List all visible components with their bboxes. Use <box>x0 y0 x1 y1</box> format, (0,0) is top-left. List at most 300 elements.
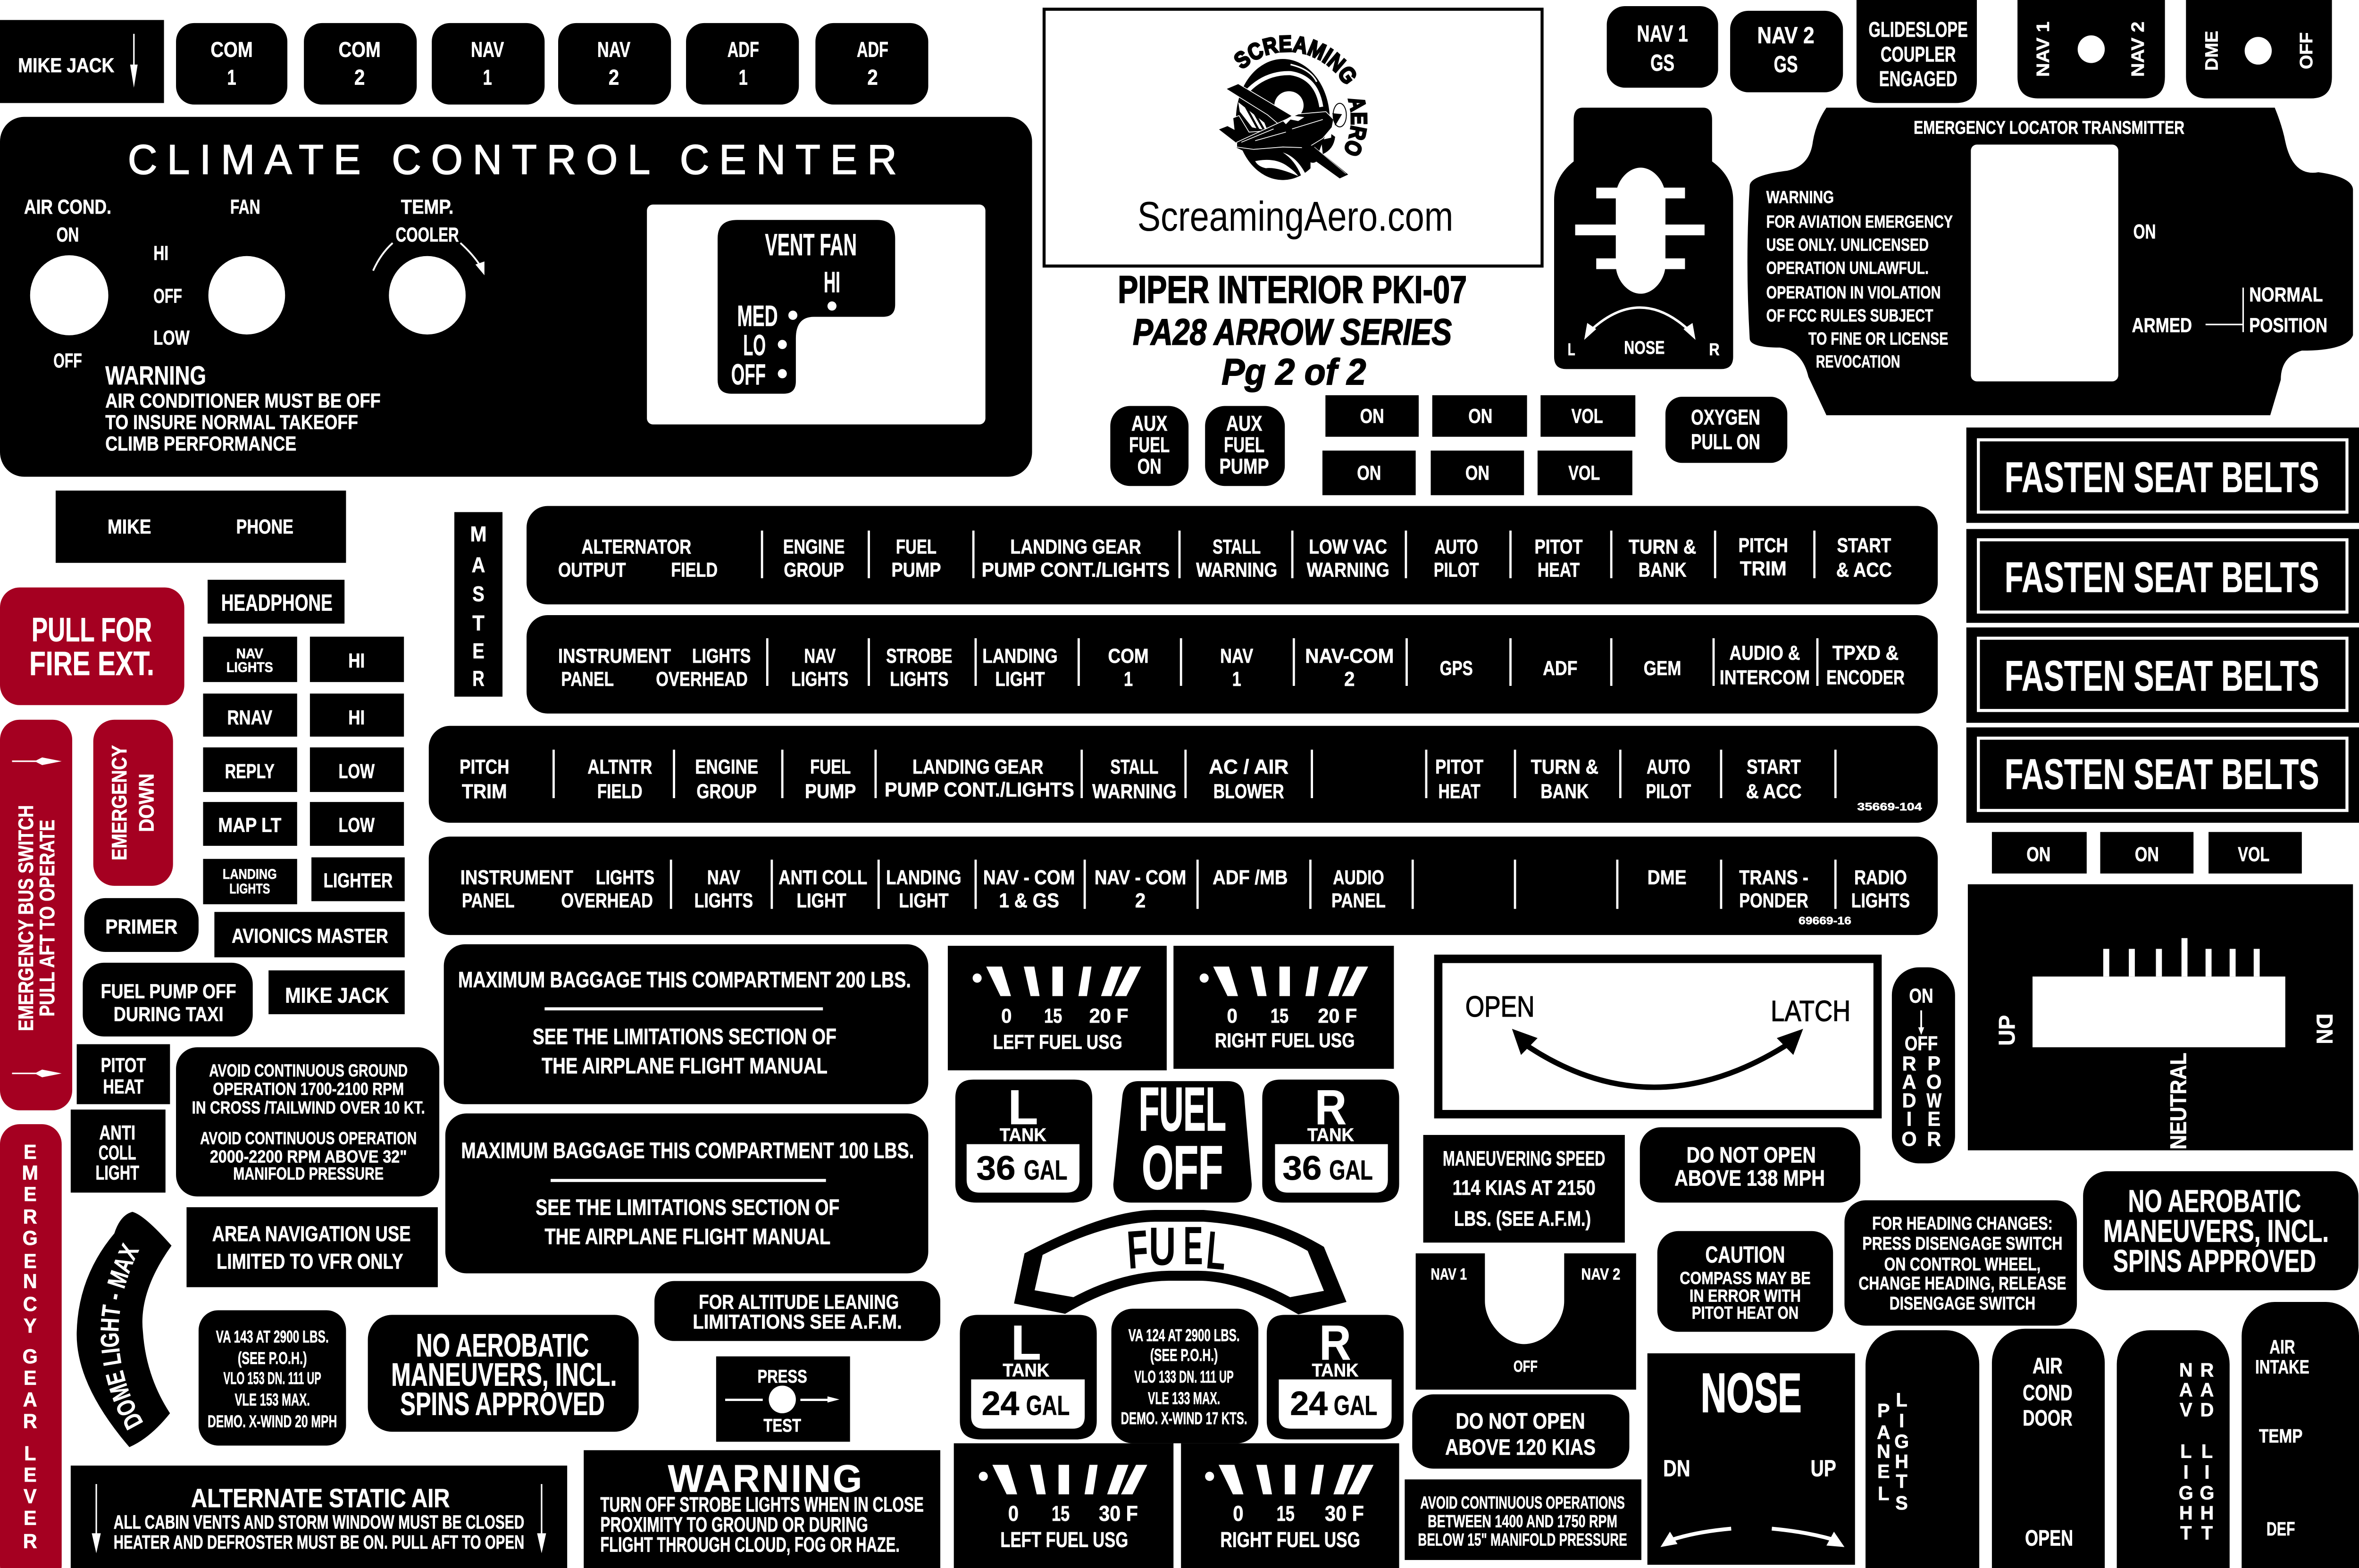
placard: avoid continuous operations: AVOID CONTINUOUS OPERATIONS <box>1420 1493 1625 1512</box>
placard: avoid continuous operation <box>176 1047 439 1196</box>
placard: fuel pump off during taxi <box>83 963 253 1036</box>
placard: panel lights: P <box>1877 1400 1890 1421</box>
placard: radio power: R <box>1927 1127 1941 1150</box>
placard: nav rad lights: L <box>2201 1441 2213 1462</box>
placard: panel lights: T <box>1896 1471 1907 1492</box>
breaker strip 1: WARNING <box>1196 559 1277 581</box>
breaker strip 2: OVERHEAD <box>656 668 748 690</box>
breaker strip 1: ALTERNATOR <box>581 535 691 558</box>
breaker strip 1: PITOT <box>1535 535 1583 558</box>
breaker strip 4: LIGHTS <box>596 866 654 889</box>
placard: com 2: COM <box>338 37 381 62</box>
placard: v speeds 124 <box>1112 1309 1258 1443</box>
breaker strip 3: START <box>1747 755 1801 778</box>
placard: emergency gear lever: E <box>24 1183 37 1205</box>
placard: caution compass: CAUTION <box>1705 1242 1785 1268</box>
warning text: TO FINE OR LICENSE <box>1808 328 1948 348</box>
placard: reply <box>203 747 297 792</box>
breaker strip 4: NAV - COM <box>983 866 1075 889</box>
placard: emergency gear lever: E <box>24 1507 37 1529</box>
placard: map lt: MAP LT <box>218 814 282 836</box>
placard: emergency gear lever: M <box>22 1161 38 1184</box>
placard: open latch: OPEN <box>1465 990 1535 1023</box>
panel: trim indicator: NEUTRAL <box>2166 1053 2191 1150</box>
placard: nav 1 gs: GS <box>1650 50 1674 76</box>
breaker strip 1: LANDING GEAR <box>1010 535 1141 558</box>
placard: radio power <box>1892 967 1955 1163</box>
placard: right tank 36 gal <box>1262 1080 1399 1202</box>
placard: left tank 36 gal: L <box>1008 1080 1038 1134</box>
placard: avionics master: AVIONICS MASTER <box>232 925 388 947</box>
breaker strip 4: ADF /MB <box>1213 866 1288 889</box>
switch: nav 1 nav 2: NAV 2 <box>2128 22 2148 77</box>
placard: headphone <box>208 580 344 624</box>
placard: maximum baggage 200: THE AIRPLANE FLIGHT MANUAL <box>542 1053 828 1078</box>
placard: alternate static air: ALTERNATE STATIC AIR <box>191 1483 450 1513</box>
placard: no aerobatic maneuvers left <box>368 1315 639 1432</box>
placard: fasten seat belts 1 <box>1966 427 2359 523</box>
placard: no aerobatic maneuvers right: NO AEROBATIC <box>2128 1184 2301 1219</box>
placard: master: R <box>472 667 485 691</box>
placard: panel lights: L <box>1878 1483 1890 1504</box>
breaker strip 4: OVERHEAD <box>561 889 653 912</box>
control: temperature knob <box>373 196 485 334</box>
logo mark: swirl and plane: SCREAMING <box>1230 31 1362 89</box>
placard: v speeds 143: VLE 153 MAX. <box>234 1390 310 1410</box>
control: air conditioning knob: OFF <box>53 350 82 372</box>
breaker strip 1: ENGINE <box>783 535 845 558</box>
breaker strip 4: NAV <box>707 866 740 889</box>
placard: emergency gear lever: L <box>24 1442 36 1465</box>
placard: panel lights: A <box>1877 1421 1891 1443</box>
placard: fuel off <box>1113 1075 1252 1202</box>
warning text: AIR CONDITIONER MUST BE OFF <box>105 390 381 412</box>
placard: pitot heat: PITOT <box>101 1054 146 1076</box>
placard: caution compass: PITOT HEAT ON <box>1692 1302 1799 1323</box>
breaker strip 2: 1 <box>1124 668 1133 690</box>
placard: right tank 36 gal: GAL <box>1329 1155 1373 1186</box>
placard: air intake temp def: AIR <box>2269 1336 2295 1358</box>
placard: maximum baggage 100 <box>445 1113 928 1273</box>
breaker strip 2: NAV <box>1220 645 1253 667</box>
placard: maximum baggage 200: SEE THE LIMITATIONS SECTION OF <box>533 1024 837 1049</box>
placard: emergency gear lever: E <box>24 1367 37 1389</box>
placard: nav rad lights: I <box>2183 1461 2189 1483</box>
breaker strip 3: ALTNTR <box>587 755 652 778</box>
breaker strip 1: GROUP <box>784 559 844 581</box>
placard: aux fuel pump: AUX <box>1226 411 1262 435</box>
control: fan knob: HI <box>153 242 168 264</box>
placard: emergency bus switch <box>0 720 72 1110</box>
placard: maneuvering speed: 114 KIAS AT 2150 <box>1453 1177 1596 1200</box>
logo panel: screaming aero <box>1044 9 1542 266</box>
panel: emergency locator transmitter: POSITION <box>2249 314 2327 336</box>
placard: right tank 36 gal: R <box>1315 1080 1347 1134</box>
breaker strip 2: 1 <box>1232 668 1241 690</box>
control: air conditioning knob <box>24 196 111 372</box>
breaker strip 2: PANEL <box>561 668 614 690</box>
placard: anti coll light <box>71 1109 166 1193</box>
placard: panel lights: H <box>1895 1451 1908 1472</box>
panel: nose steering trim: NOSE <box>1624 337 1665 358</box>
placard: master: E <box>472 639 485 663</box>
placard: nav 1 gs <box>1607 6 1718 88</box>
placard: left fuel usg 20: LEFT FUEL USG <box>993 1031 1122 1053</box>
placard: map lt <box>203 802 297 846</box>
breaker strip 3: TRIM <box>462 780 507 802</box>
placard: nav rad lights: I <box>2204 1461 2209 1483</box>
placard: landing lights: LIGHTS <box>229 882 270 897</box>
placard: emergency gear lever: N <box>23 1270 37 1292</box>
breaker strip 3: LANDING GEAR <box>912 755 1043 778</box>
panel: trim indicator: UP <box>1994 1015 2020 1046</box>
placard: mike jack <box>0 20 164 103</box>
placard: emergency gear lever: G <box>23 1345 38 1368</box>
placard: nav 1: NAV <box>471 37 504 62</box>
panel: nose steering trim: L <box>1568 340 1575 359</box>
placard: nav rad lights: G <box>2200 1482 2214 1504</box>
placard: area navigation use <box>186 1207 438 1287</box>
switch: dme off <box>2186 0 2332 99</box>
placard: left fuel usg 20: 20 F <box>1089 1005 1129 1027</box>
placard: nav rad lights: G <box>2179 1482 2193 1504</box>
breaker strip 3: PITOT <box>1435 755 1483 778</box>
placard: air cond door: OPEN <box>2025 1526 2073 1551</box>
placard: hi: HI <box>348 649 365 672</box>
placard: no aerobatic maneuvers left: MANEUVERS, INCL. <box>391 1357 617 1393</box>
placard: avoid continuous operations: BETWEEN 1400 AND 1750 RPM <box>1428 1511 1617 1531</box>
placard: emergency down <box>93 720 173 886</box>
placard: glideslope coupler engaged <box>1857 0 1977 103</box>
placard: adf 1: ADF <box>728 37 759 62</box>
warning text: OPERATION IN VIOLATION <box>1766 282 1941 302</box>
placard: radio power: P <box>1927 1052 1941 1075</box>
placard: com 1: COM <box>210 37 253 62</box>
placard: right tank 24 gal: TANK <box>1312 1360 1359 1381</box>
breaker strip 4 <box>429 836 1938 935</box>
placard: hi <box>310 693 404 737</box>
placard: primer: PRIMER <box>105 915 177 938</box>
placard: radio power: O <box>1901 1127 1917 1150</box>
placard: nav 2 gs: NAV 2 <box>1757 23 1815 48</box>
breaker strip 2: STROBE <box>886 645 952 667</box>
breaker strip 2: LIGHTS <box>791 668 848 690</box>
switch: dme off: DME <box>2202 31 2222 71</box>
placard: pitot heat: HEAT <box>103 1076 144 1098</box>
breaker strip 4: AUDIO <box>1333 866 1384 889</box>
placard: nav rad lights: T <box>2201 1522 2213 1543</box>
placard: left fuel usg 30: 30 F <box>1099 1501 1138 1526</box>
placard: v speeds 143: (SEE P.O.H.) <box>238 1349 307 1368</box>
breaker strip 4: DME <box>1648 866 1687 889</box>
placard: emergency gear lever: Y <box>24 1314 37 1337</box>
breaker strip 3: GROUP <box>696 780 757 802</box>
placard: air intake temp def: INTAKE <box>2255 1356 2309 1377</box>
placard: fasten seat belts 3 <box>1966 627 2359 723</box>
placard: radio power: E <box>1927 1108 1941 1130</box>
placard: avoid continuous operation: 2000-2200 RPM ABOVE 32" <box>210 1146 407 1167</box>
breaker strip 3 <box>429 726 1938 823</box>
placard: air intake temp def: TEMP <box>2259 1426 2302 1447</box>
placard: panel lights: E <box>1877 1461 1890 1482</box>
placard: avoid continuous operation: IN CROSS /TAILWIND OVER 10 KT. <box>192 1097 425 1117</box>
placards: on on vol row 1 <box>1325 395 1635 437</box>
warning text <box>1766 187 1953 371</box>
placard: right fuel usg 20: RIGHT FUEL USG <box>1215 1029 1355 1051</box>
placard: right tank 36 gal: 36 <box>1282 1150 1322 1187</box>
breaker strip 4: INSTRUMENT <box>460 866 573 889</box>
breaker strip 3: HEAT <box>1438 780 1481 802</box>
warning text <box>105 360 381 455</box>
placard: left fuel usg 30: 0 <box>1008 1501 1019 1526</box>
placard: right tank 36 gal: TANK <box>1307 1125 1354 1145</box>
breaker strip 2 <box>527 615 1938 714</box>
placard: adf 2: 2 <box>867 65 878 89</box>
placard: right fuel usg 20: 0 <box>1227 1005 1238 1027</box>
breaker strip 2: TPXD & <box>1832 642 1899 664</box>
placard: pull for fire ext: PULL FOR <box>32 611 152 649</box>
placard: aux fuel pump: PUMP <box>1220 454 1269 478</box>
placard: air cond door: AIR <box>2033 1353 2063 1378</box>
placard: nav 1 nav 2 off selector: NAV 2 <box>1581 1265 1620 1283</box>
placard: nav 1 nav 2 off selector: NAV 1 <box>1431 1265 1467 1283</box>
placard: maximum baggage 100: SEE THE LIMITATIONS SECTION OF <box>535 1195 839 1220</box>
placard: altitude leaning: FOR ALTITUDE LEANING <box>699 1291 899 1313</box>
placard: nose dn up: NOSE <box>1701 1362 1802 1424</box>
placard: mike jack <box>268 970 405 1014</box>
placard: nav rad lights: D <box>2200 1399 2214 1421</box>
placard: left fuel usg 20: 15 <box>1044 1005 1062 1027</box>
placard: nav lights: LIGHTS <box>226 660 273 676</box>
placard: adf 1: 1 <box>739 65 748 89</box>
placard: avoid continuous operation: MANIFOLD PRESSURE <box>233 1163 384 1184</box>
placard: left tank 36 gal: GAL <box>1024 1155 1067 1186</box>
placard: v speeds 124: VLE 133 MAX. <box>1148 1389 1220 1408</box>
placard: area navigation use: AREA NAVIGATION USE <box>212 1221 411 1246</box>
breaker strip 3: 35669-104 <box>1857 801 1922 813</box>
warning text: OPERATION UNLAWFUL. <box>1766 258 1929 277</box>
placard: do not open above 120 kias: ABOVE 120 KIAS <box>1445 1435 1596 1460</box>
placard: air intake temp def: DEF <box>2267 1518 2295 1540</box>
breaker strip 2: LIGHTS <box>890 668 949 690</box>
placard: radio power: O <box>1926 1071 1941 1093</box>
placard: caution compass <box>1657 1231 1833 1332</box>
placard: nav 2 <box>558 23 671 105</box>
placard: warning strobe lights: TURN OFF STROBE LIGHTS WHEN IN CLOSE <box>600 1493 924 1517</box>
placard: right tank 24 gal: GAL <box>1334 1390 1377 1421</box>
placard: press test: PRESS <box>758 1366 807 1387</box>
panel: emergency locator transmitter: ARMED <box>2132 314 2192 336</box>
breaker strip 1: PILOT <box>1434 559 1479 581</box>
panel: nose steering trim: R <box>1709 340 1720 359</box>
switch: nav 1 nav 2: NAV 1 <box>2033 22 2053 77</box>
breaker strip 1: STALL <box>1213 535 1261 558</box>
placard: aux fuel on: AUX <box>1131 411 1167 435</box>
placards: on on vol row 2: ON <box>1357 462 1381 484</box>
switch: nav 1 nav 2 <box>2017 0 2165 99</box>
placard: left fuel usg 20 <box>948 946 1167 1070</box>
breaker strip 4: PANEL <box>462 889 515 912</box>
placard: left tank 24 gal <box>960 1315 1097 1439</box>
placard: maximum baggage 100: MAXIMUM BAGGAGE THIS COMPARTMENT 100 LBS. <box>461 1138 914 1163</box>
placard: nav rad lights: N <box>2179 1359 2193 1381</box>
breaker strip 2: GEM <box>1644 657 1681 679</box>
placard: pitot heat <box>77 1044 170 1104</box>
placard: left tank 24 gal: 24 <box>982 1385 1020 1422</box>
breaker strip 4: 69669-16 <box>1799 915 1851 926</box>
placard: warning strobe lights: PROXIMITY TO GROUND OR DURING <box>600 1514 868 1536</box>
placard: right tank 24 gal <box>1267 1315 1404 1439</box>
placard: no aerobatic maneuvers left: NO AEROBATIC <box>416 1328 589 1364</box>
placard: emergency gear lever: V <box>24 1485 37 1508</box>
placard: oxygen pull on <box>1665 397 1787 463</box>
placard: hi <box>310 637 404 682</box>
placard: adf 2: ADF <box>857 37 888 62</box>
breaker strip 1 <box>527 506 1938 604</box>
placard: nav 2: NAV <box>597 37 630 62</box>
placard: no aerobatic maneuvers left: SPINS APPROVED <box>400 1386 605 1422</box>
control: fan knob: OFF <box>153 285 182 307</box>
breaker strip 3: PITCH <box>460 755 509 778</box>
placard: caution compass: COMPASS MAY BE <box>1680 1268 1811 1288</box>
breaker strip 2: ENCODER <box>1826 666 1905 689</box>
vent fan cutout: HI <box>824 266 840 299</box>
placard: nav 1 nav 2 off selector: OFF <box>1514 1358 1538 1376</box>
placard: emergency down: DOWN <box>134 774 158 832</box>
placard: v speeds 143 <box>199 1310 346 1445</box>
logo mark: swirl and plane <box>1219 31 1372 183</box>
placard: heading changes: CHANGE HEADING, RELEASE <box>1858 1273 2066 1294</box>
placard: fuel arc: F <box>1125 1219 1150 1280</box>
placard: nav rad lights: A <box>2200 1379 2214 1401</box>
placard: lighter <box>311 858 405 901</box>
placard: v speeds 124: VLO 133 DN. 111 UP <box>1134 1367 1234 1386</box>
breaker strip 1: FUEL <box>896 535 937 558</box>
placard: emergency gear lever: E <box>24 1464 37 1486</box>
placard: master <box>454 512 502 697</box>
switch: dme off: OFF <box>2297 32 2317 69</box>
control: fan knob: LOW <box>153 326 190 349</box>
placard: warning strobe lights: WARNING <box>668 1458 862 1500</box>
placards: on on vol row 2: ON <box>1465 462 1489 484</box>
heading: climate control center: CLIMATE CONTROL CENTER <box>128 137 907 183</box>
placard: master: T <box>472 611 485 635</box>
placard: fasten seat belts 4 <box>1966 727 2359 823</box>
breaker strip 2: COM <box>1108 645 1149 667</box>
warning text: OF FCC RULES SUBJECT <box>1766 305 1933 325</box>
placard: oxygen pull on: OXYGEN <box>1691 405 1760 429</box>
breaker strip 4: ANTI COLL <box>778 866 867 889</box>
placard: emergency gear lever: G <box>23 1227 38 1249</box>
document title: Pg 2 of 2 <box>1221 351 1366 392</box>
breaker strip 2: NAV <box>804 645 836 667</box>
placard: right fuel usg 30: RIGHT FUEL USG <box>1220 1527 1360 1552</box>
placard: warning strobe lights: FLIGHT THROUGH CLOUD, FOG OR HAZE. <box>600 1534 900 1557</box>
placard: left tank 36 gal <box>955 1080 1092 1202</box>
breaker strip 2: NAV-COM <box>1305 645 1394 667</box>
placard: left fuel usg 30 <box>954 1443 1173 1568</box>
placards: on on vol row 2: VOL <box>1568 462 1600 484</box>
vent fan cutout: MED <box>737 300 778 332</box>
placard: avionics master <box>214 912 405 957</box>
placard: heading changes <box>1844 1201 2077 1326</box>
placard: nav rad lights: T <box>2180 1522 2192 1543</box>
placard: air cond door: DOOR <box>2023 1406 2073 1430</box>
warning text: WARNING <box>105 360 206 390</box>
placard: panel lights: I <box>1899 1410 1904 1431</box>
placard: pull for fire ext <box>0 587 184 705</box>
placard: radio power: W <box>1926 1089 1941 1111</box>
placards: on on vol row 3: ON <box>2135 843 2159 866</box>
placard: air cond door: COND <box>2023 1380 2073 1405</box>
placard: left tank 24 gal: L <box>1011 1315 1041 1370</box>
control: fan knob <box>153 196 285 349</box>
placard: anti coll light: COLL <box>99 1142 136 1164</box>
breaker strip 2: LANDING <box>982 645 1058 667</box>
placard: aux fuel on <box>1110 406 1188 486</box>
placard: adf 2 <box>815 23 928 105</box>
panel: emergency locator transmitter: NORMAL <box>2249 284 2323 306</box>
breaker strip 1: AUTO <box>1434 535 1478 558</box>
placard: radio power: ON <box>1909 984 1933 1007</box>
breaker strip 1: & ACC <box>1836 559 1892 581</box>
panel: trim indicator: DN <box>2312 1013 2337 1044</box>
placard: right fuel usg 30: 15 <box>1277 1501 1295 1526</box>
breaker strip 4: 2 <box>1135 889 1146 912</box>
breaker strip 1: TURN & <box>1629 535 1696 558</box>
placard: radio power: OFF <box>1905 1032 1938 1055</box>
placard: right tank 24 gal: R <box>1320 1315 1351 1370</box>
placard: mike phone: PHONE <box>236 516 293 538</box>
breaker strip 1: START <box>1837 534 1891 556</box>
breaker strip 4: LIGHT <box>899 889 949 912</box>
placard: warning strobe lights <box>584 1450 940 1568</box>
placard: avoid continuous operations <box>1405 1479 1641 1560</box>
placard: left tank 36 gal: 36 <box>977 1150 1015 1187</box>
control: air conditioning knob: ON <box>57 223 79 246</box>
placard: emergency gear lever: A <box>23 1388 37 1410</box>
placard: nav lights <box>203 637 297 682</box>
placard: do not open above 120 kias <box>1412 1394 1629 1468</box>
placard: nav 2: 2 <box>609 65 619 89</box>
placard: air intake temp def <box>2242 1302 2359 1568</box>
panel: climate control center <box>0 117 1032 477</box>
breaker strip 3: PUMP <box>805 780 856 802</box>
panel: emergency locator transmitter <box>1748 108 2353 415</box>
breaker strip 2: GPS <box>1440 657 1473 679</box>
placard: nose dn up <box>1648 1353 1855 1565</box>
placard: dome light max: DOME LIGHT - MAX <box>95 1239 149 1434</box>
breaker strip 3: WARNING <box>1092 780 1177 802</box>
placard: nav rad lights: L <box>2180 1441 2192 1462</box>
breaker strip 4: TRANS - <box>1739 866 1808 889</box>
placard: nav 1 <box>432 23 544 105</box>
placard: nav rad lights: V <box>2180 1399 2192 1421</box>
placard: fuel pump off during taxi: DURING TAXI <box>114 1003 224 1026</box>
placard: left fuel usg 30: LEFT FUEL USG <box>1000 1527 1128 1552</box>
placard: radio power: I <box>1907 1108 1912 1130</box>
placard: radio power: R <box>1902 1052 1916 1075</box>
placard: nav rad lights <box>2117 1330 2230 1568</box>
placard: mike phone: MIKE <box>108 516 151 538</box>
breaker strip 3: PUMP CONT./LIGHTS <box>885 778 1074 801</box>
placard: com 1 <box>176 23 287 105</box>
panel: trim indicator <box>1968 884 2353 1151</box>
breaker strip 1: TRIM <box>1740 557 1787 579</box>
placard: v speeds 124: VA 124 AT 2900 LBS. <box>1129 1326 1240 1345</box>
placard: mike phone <box>56 491 346 563</box>
placard: panel lights: S <box>1895 1492 1908 1514</box>
